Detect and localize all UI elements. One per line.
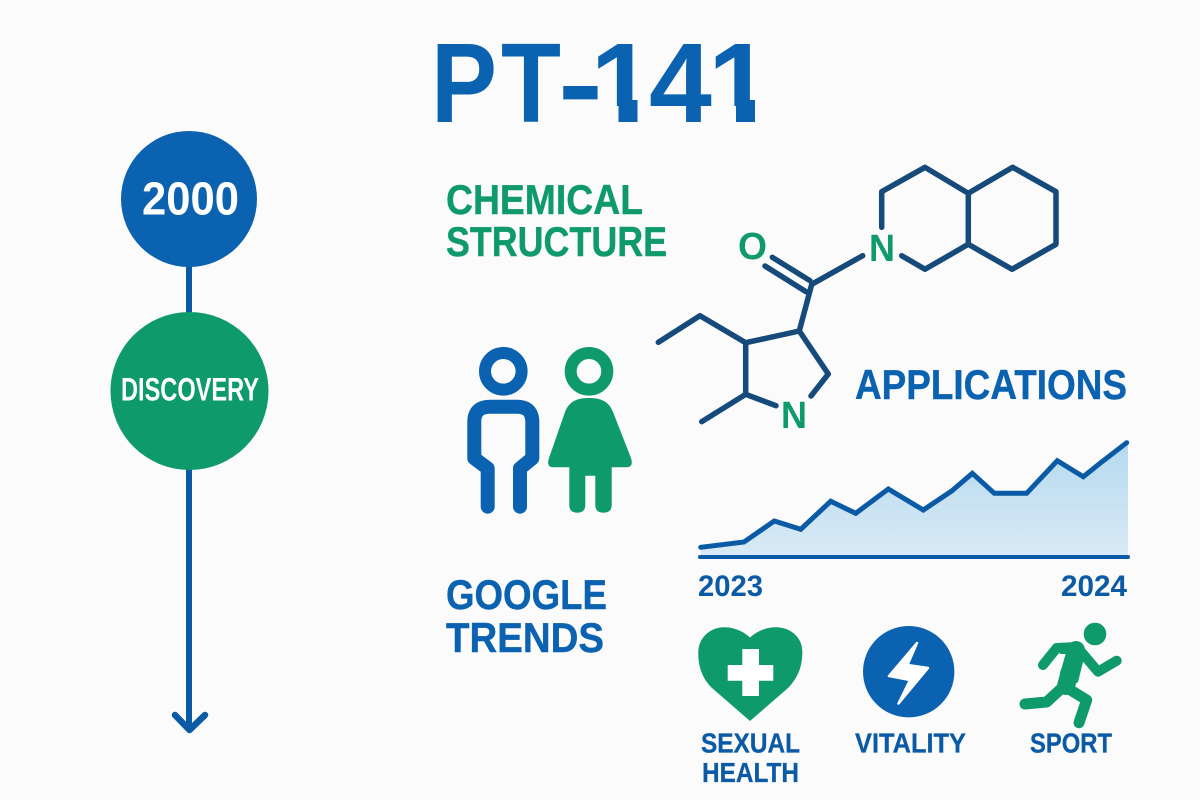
icon: lightning bolt bbox=[863, 626, 954, 717]
atom labels: N bbox=[781, 395, 807, 437]
heading: chemical structure: CHEMICAL bbox=[446, 176, 643, 223]
chemical structure diagram bbox=[658, 167, 1056, 437]
heading: google trends bbox=[446, 571, 607, 661]
timeline arrow bbox=[175, 260, 205, 730]
icon: woman bbox=[548, 353, 632, 513]
title: 4 bbox=[649, 20, 712, 146]
title: P bbox=[431, 20, 497, 146]
label: vitality: VITALITY bbox=[855, 728, 966, 758]
atom labels bbox=[738, 226, 895, 437]
atom labels: O bbox=[738, 226, 767, 268]
heading: applications: APPLICATIONS bbox=[855, 361, 1127, 408]
label: sexual health: HEALTH bbox=[702, 757, 799, 788]
application: vitality bbox=[855, 626, 966, 758]
heading: chemical structure: STRUCTURE bbox=[446, 218, 667, 265]
timeline node: discovery bbox=[110, 312, 268, 470]
chart axis labels: 2023 bbox=[698, 570, 763, 603]
label: sport: SPORT bbox=[1030, 728, 1112, 758]
title: 1 bbox=[708, 20, 771, 146]
label: sexual health bbox=[701, 728, 800, 788]
people icons bbox=[474, 353, 632, 513]
icon: heart with cross bbox=[698, 627, 802, 721]
heading: chemical structure bbox=[446, 176, 667, 265]
icon: runner bbox=[1025, 623, 1117, 723]
application: sexual health bbox=[698, 627, 802, 788]
chart axis labels bbox=[698, 570, 1127, 603]
timeline node: 2000 bbox=[121, 131, 257, 267]
molecule bonds bbox=[658, 167, 1056, 422]
heading: google trends: GOOGLE bbox=[446, 571, 607, 618]
timeline node: discovery: DISCOVERY bbox=[121, 372, 259, 408]
chart trend line bbox=[701, 443, 1127, 547]
area chart: google trends bbox=[698, 442, 1128, 603]
timeline bbox=[110, 131, 268, 730]
atom labels: N bbox=[869, 228, 895, 270]
chart axis labels: 2024 bbox=[1061, 570, 1127, 603]
title: - bbox=[558, 20, 603, 146]
icon: man bbox=[474, 353, 532, 507]
title bbox=[431, 20, 776, 146]
application: sport bbox=[1025, 623, 1117, 758]
chart baseline bbox=[700, 555, 1128, 559]
title: T bbox=[501, 20, 561, 146]
timeline node: 2000: 2000 bbox=[142, 172, 239, 224]
label: sexual health: SEXUAL bbox=[701, 728, 800, 758]
title: 1 bbox=[590, 20, 653, 146]
heading: google trends: TRENDS bbox=[446, 614, 604, 661]
chart area fill bbox=[701, 442, 1128, 556]
